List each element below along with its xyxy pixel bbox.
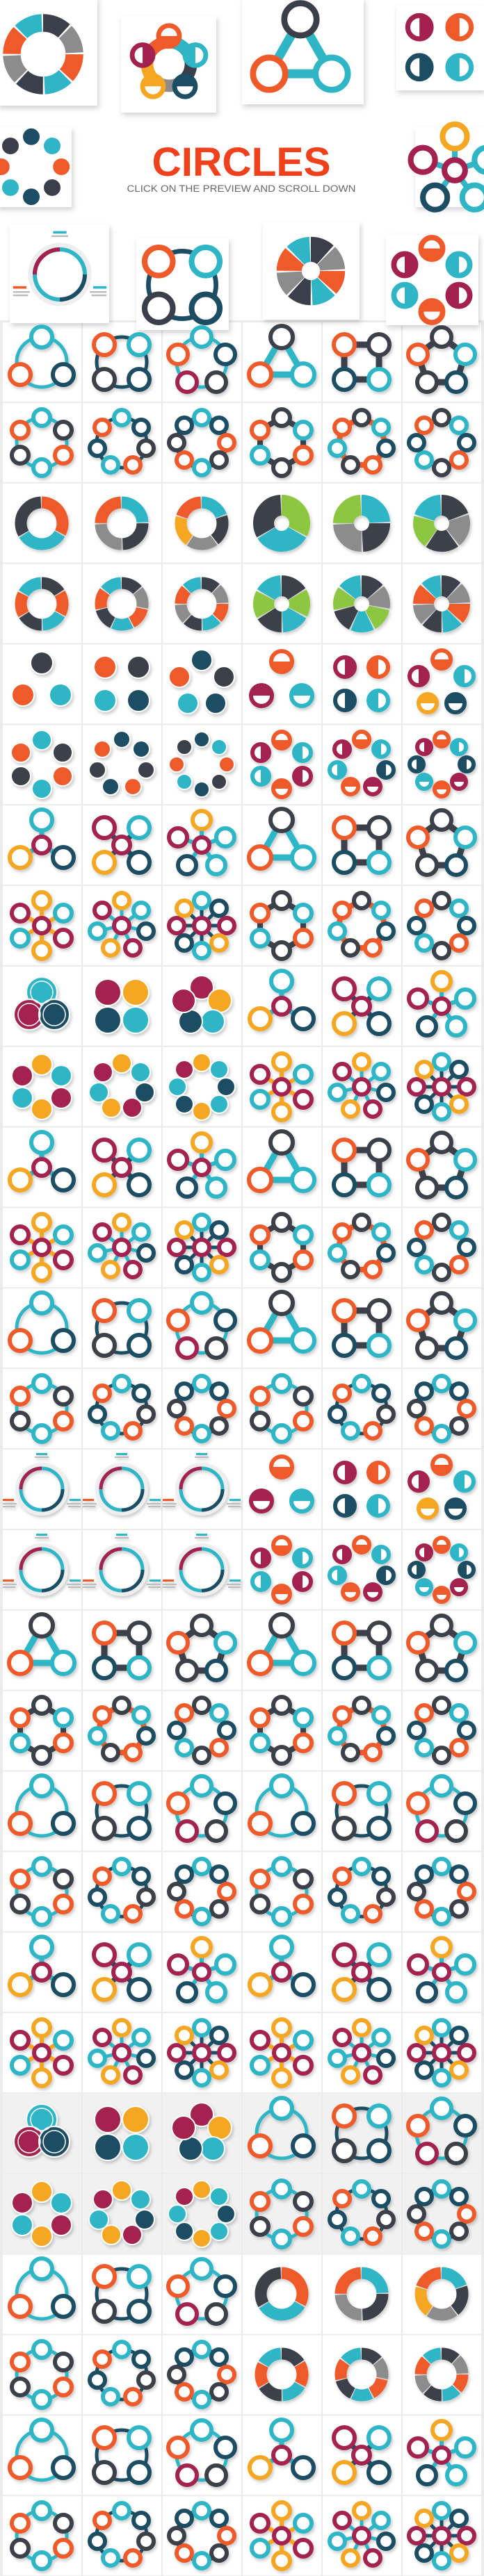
row 24 xyxy=(10,2258,462,2324)
card: spiral nodes xyxy=(411,124,484,210)
row 3 xyxy=(21,583,460,625)
card: segmented donut xyxy=(0,0,97,106)
row 15 xyxy=(3,1534,474,1602)
subtitle: CLICK ON THE PREVIEW AND SCROLL DOWN xyxy=(127,183,356,194)
row 16 xyxy=(9,1614,475,1680)
row 23 xyxy=(12,2181,474,2247)
row 1 xyxy=(12,409,474,476)
row 27 xyxy=(12,2502,474,2569)
row 2 xyxy=(21,502,460,544)
row 26 xyxy=(10,2420,474,2485)
row 22 xyxy=(14,2098,475,2163)
card: pentagon ring xyxy=(121,16,216,113)
row 14 xyxy=(3,1453,474,1518)
row 25 xyxy=(12,2341,462,2408)
row 7 xyxy=(12,892,474,959)
card: pie with hole xyxy=(263,222,360,320)
card: four loops xyxy=(136,238,229,330)
card: thin ring options xyxy=(10,224,109,323)
card: six half circles xyxy=(386,235,478,325)
row 0 xyxy=(10,326,475,392)
card: dots ring xyxy=(0,127,72,207)
row 4 xyxy=(12,650,474,714)
row 10 xyxy=(10,1131,475,1197)
title: CIRCLES xyxy=(152,140,331,185)
card: half circles xyxy=(396,6,484,90)
row 20 xyxy=(10,1937,474,2001)
row 13 xyxy=(12,1375,474,1442)
row 21 xyxy=(12,2019,474,2086)
row 6 xyxy=(10,809,475,875)
row 5 xyxy=(11,730,474,798)
row 9 xyxy=(12,1053,474,1120)
header preview cards xyxy=(0,0,484,330)
row 11 xyxy=(12,1214,474,1281)
row 12 xyxy=(10,1292,475,1358)
row 19 xyxy=(12,1858,474,1925)
row 18 xyxy=(10,1775,475,1841)
card: triangle loops xyxy=(242,0,364,104)
row 8 xyxy=(14,971,474,1035)
row 17 xyxy=(12,1697,474,1764)
